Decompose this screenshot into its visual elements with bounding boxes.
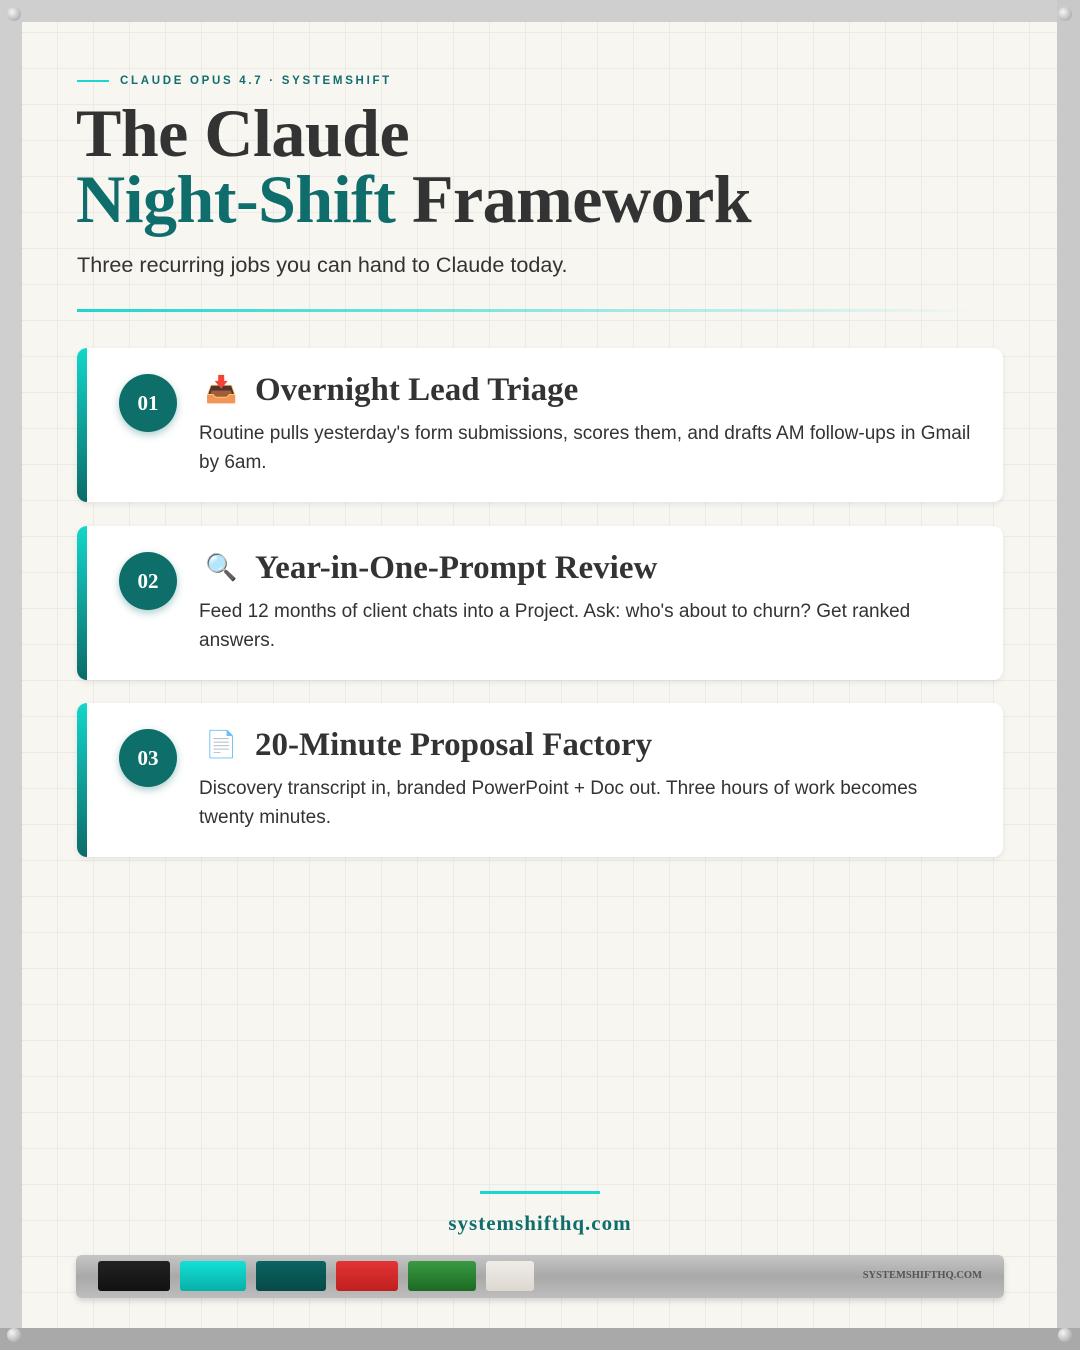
heading 01: Overnight Lead Triage bbox=[255, 372, 578, 408]
card 03 bbox=[77, 703, 1003, 857]
description 03: Discovery transcript in, branded PowerPoint + Doc out. Three hours of work becomes twenty minutes. bbox=[199, 778, 917, 828]
subtitle: Three recurring jobs you can hand to Claude today. bbox=[77, 252, 568, 277]
heading 03: 20-Minute Proposal Factory bbox=[255, 727, 652, 763]
title bbox=[76, 95, 752, 237]
number badge 02: 02 bbox=[138, 568, 158, 592]
icon: inbox tray: 📥 bbox=[205, 374, 237, 404]
title: The Claude bbox=[76, 95, 409, 171]
marker tray: SYSTEMSHIFTHQ.COM bbox=[863, 1270, 982, 1281]
description 02: Feed 12 months of client chats into a Project. Ask: who's about to churn? Get ranked answers. bbox=[199, 601, 910, 650]
icon: magnifier: 🔍 bbox=[205, 552, 237, 582]
number badge 03 bbox=[119, 729, 177, 787]
number badge 03: 03 bbox=[138, 746, 158, 770]
eyebrow label: CLAUDE OPUS 4.7 · SYSTEMSHIFT bbox=[120, 75, 392, 87]
title: Night-Shift Framework bbox=[76, 161, 751, 237]
footer url: systemshifthq.com bbox=[448, 1211, 632, 1235]
number badge 01 bbox=[119, 374, 177, 432]
icon: document: 📄 bbox=[205, 729, 237, 759]
marker tray bbox=[76, 1255, 1004, 1298]
card 02 bbox=[77, 526, 1003, 680]
number badge 02 bbox=[119, 552, 177, 610]
card 01 bbox=[77, 348, 1003, 502]
number badge 01: 01 bbox=[138, 390, 158, 414]
heading 02: Year-in-One-Prompt Review bbox=[255, 550, 657, 586]
description 01: Routine pulls yesterday's form submissions, scores them, and drafts AM follow-ups in Gmail by 6am. bbox=[199, 423, 970, 472]
